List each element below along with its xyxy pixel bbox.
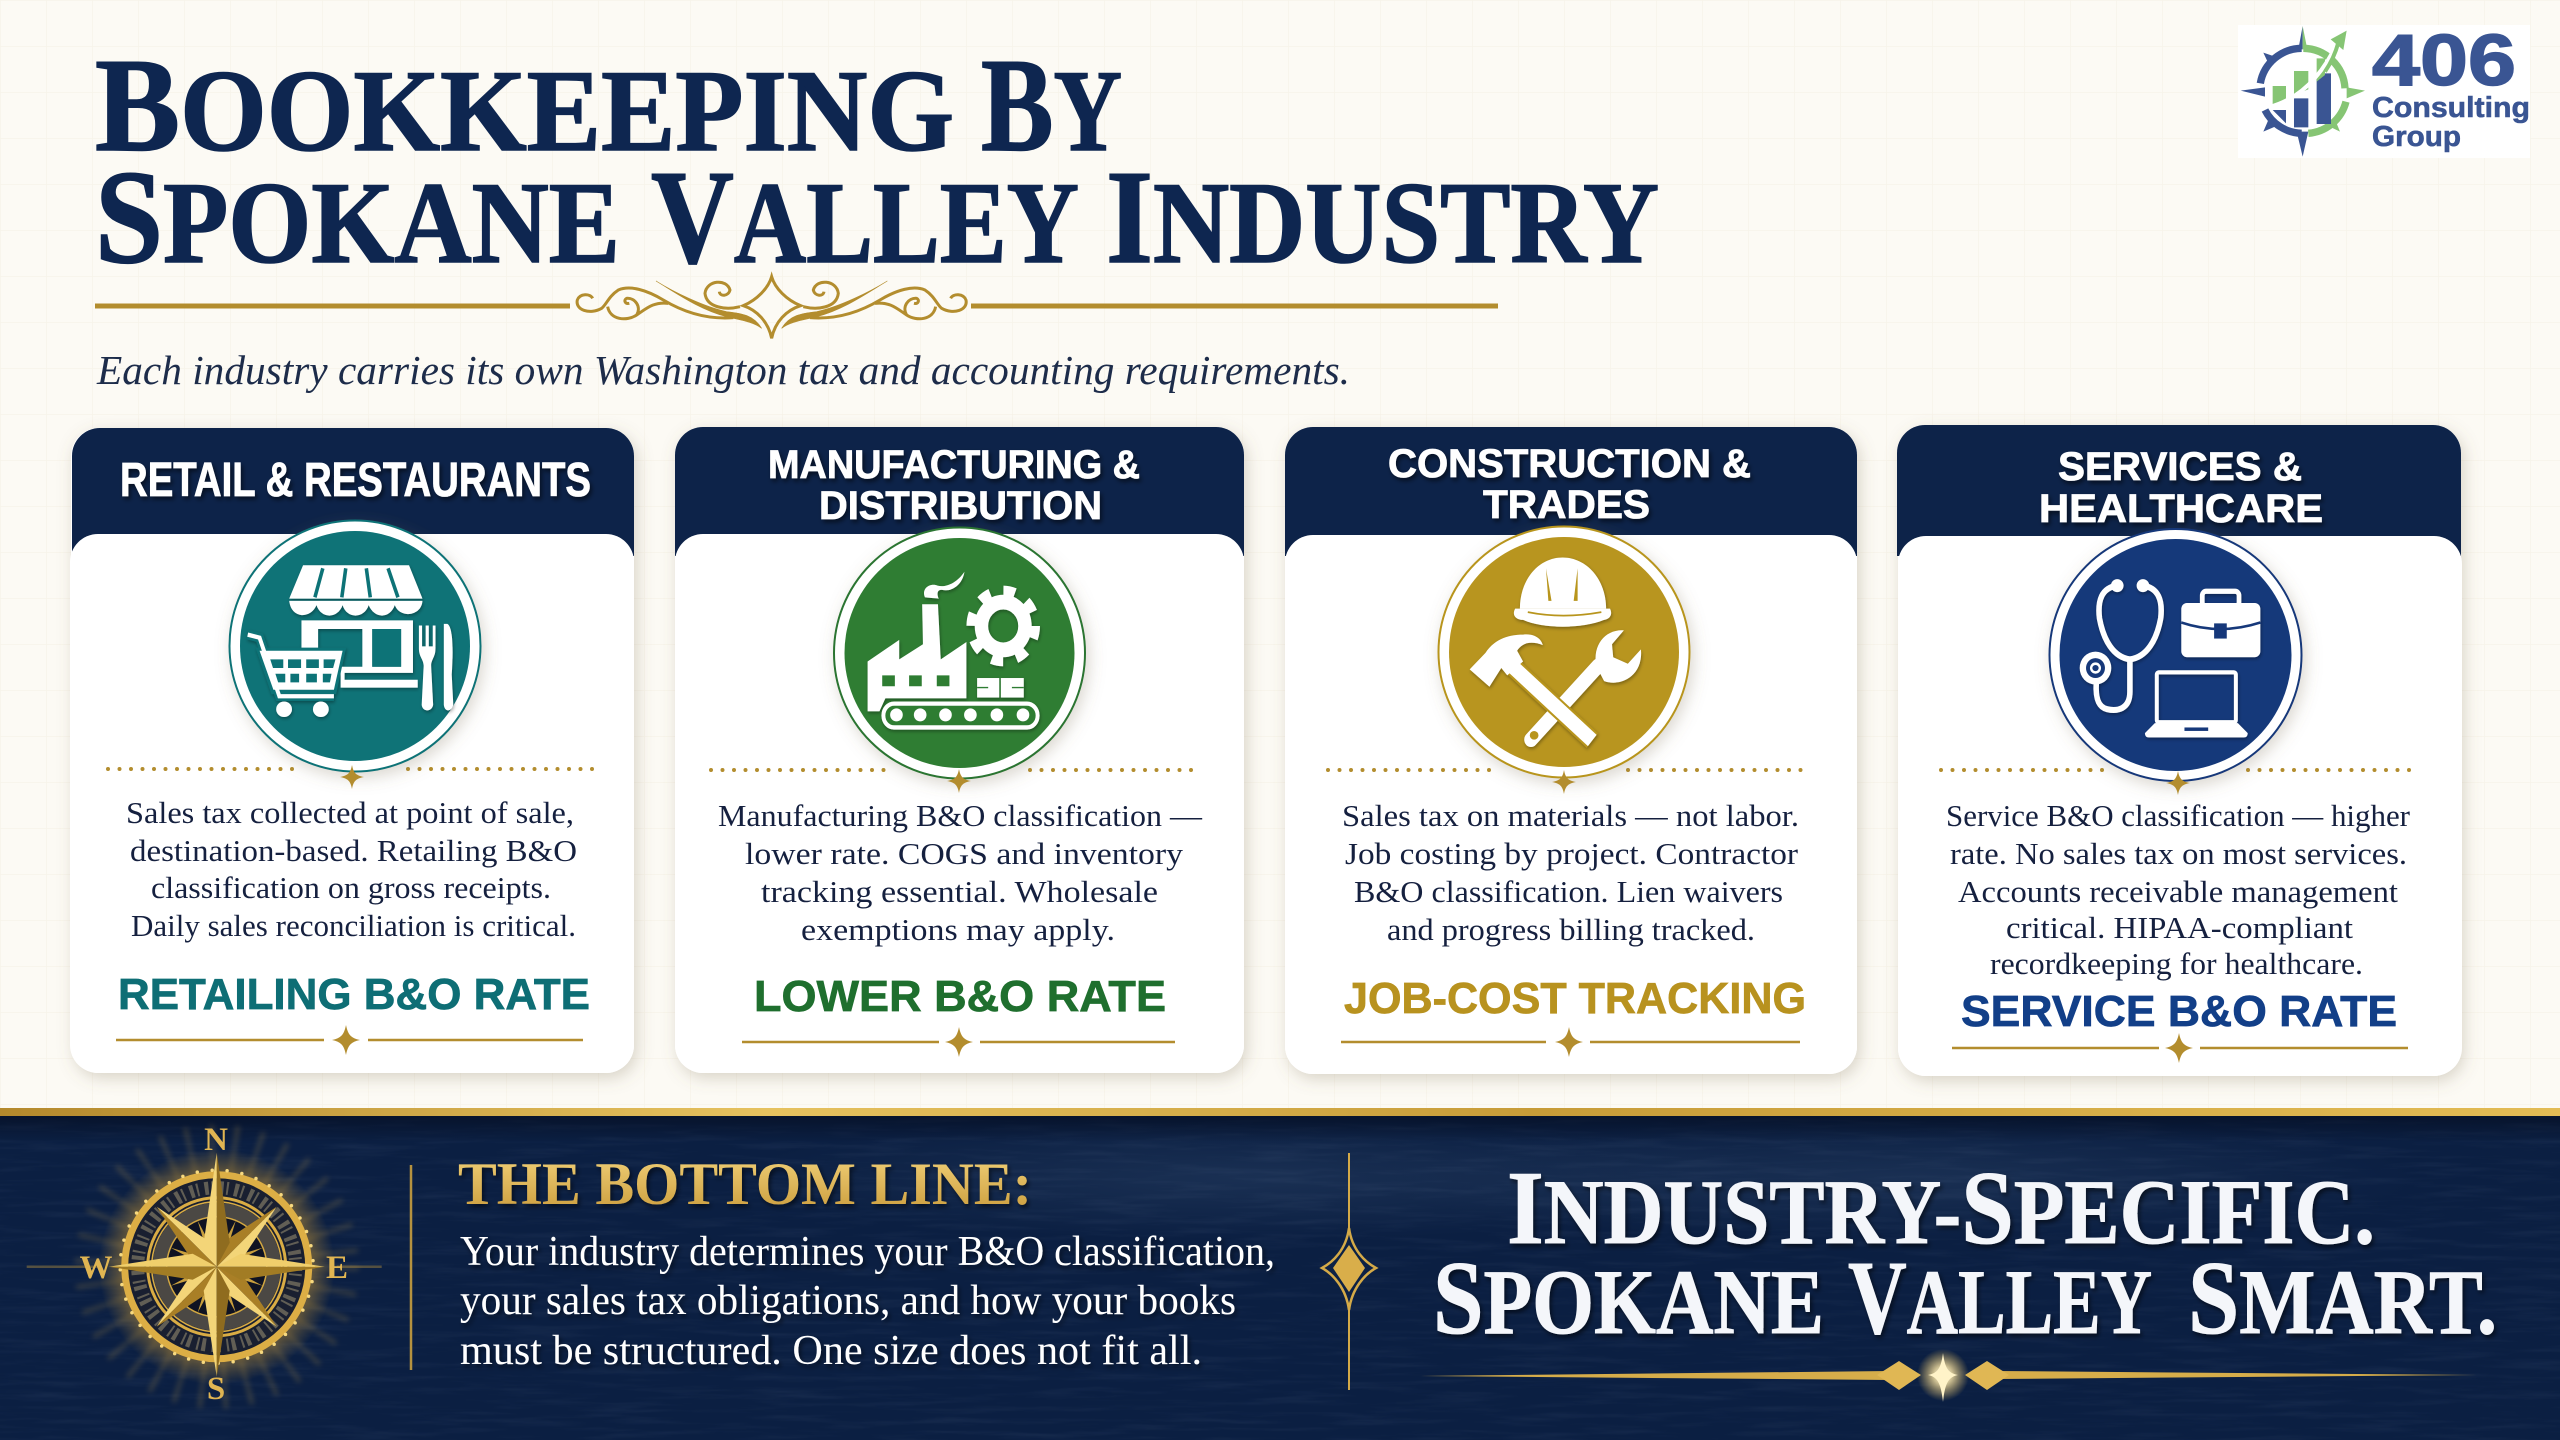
body text: exemptions may apply. [801, 912, 1115, 947]
body text [718, 798, 1203, 947]
rate divider [116, 1025, 583, 1055]
icon: gold compass rose: E [326, 1250, 348, 1286]
body text: destination-based. Retailing B&O [130, 833, 577, 868]
logo: 406 Consulting Group: 406 [2372, 21, 2516, 101]
heading: TRADES [1483, 483, 1650, 527]
closing headline: INDUSTRY-SPECIFIC. [1507, 1149, 2375, 1266]
closing headline: SPOKANE [1433, 1239, 1824, 1356]
rate divider [742, 1027, 1175, 1057]
title: SPOKANE [95, 143, 620, 291]
body text: recordkeeping for healthcare. [1990, 946, 2363, 981]
heading: HEALTHCARE [2039, 487, 2323, 531]
body text: Accounts receivable management [1958, 874, 2398, 909]
body text: critical. HIPAA-compliant [2006, 910, 2353, 945]
title: VALLEY [651, 143, 1079, 291]
title: INDUSTRY [1106, 143, 1659, 291]
icon: gold compass rose: N [204, 1122, 228, 1158]
body text: Service B&O classification — higher [1946, 798, 2411, 833]
panel: retail & restaurants [70, 428, 634, 1073]
rate label: SERVICE B&O RATE [1961, 987, 2397, 1036]
heading: MANUFACTURING & [768, 443, 1140, 487]
logo compass mark [2241, 26, 2365, 157]
body text: lower rate. COGS and inventory [745, 836, 1184, 871]
body text [1342, 798, 1799, 947]
body text: classification on gross receipts. [151, 870, 551, 905]
body text: rate. No sales tax on most services. [1950, 836, 2407, 871]
panel: manufacturing & distribution [675, 427, 1244, 1073]
heading [768, 443, 1140, 528]
bottom band [0, 1108, 2560, 1440]
closing headline: VALLEY [1848, 1239, 2152, 1356]
icon: gold star [947, 769, 971, 793]
bottom line heading: THE BOTTOM LINE: [458, 1151, 1032, 1217]
closing flourish [1420, 1349, 2477, 1402]
divider: bottom line [410, 1165, 412, 1370]
title [95, 31, 1659, 291]
body text [1946, 798, 2411, 981]
heading [2039, 445, 2323, 531]
bottom line text: must be structured. One size does not fit all. [460, 1328, 1202, 1374]
body text: B&O classification. Lien waivers [1354, 874, 1783, 909]
rate divider [1952, 1033, 2408, 1063]
heading [1388, 442, 1751, 527]
rate divider [1341, 1027, 1800, 1057]
vertical ornament [1322, 1153, 1376, 1390]
logo: 406 Consulting Group: Consulting [2372, 92, 2530, 124]
subtitle: Each industry carries its own Washington tax and accounting requirements. [96, 347, 1350, 393]
icon: gold compass rose: W [80, 1250, 112, 1286]
closing headline [1433, 1149, 2497, 1356]
rate label: LOWER B&O RATE [754, 972, 1166, 1021]
body text: Manufacturing B&O classification — [718, 798, 1203, 833]
bottom line text: your sales tax obligations, and how your books [460, 1278, 1236, 1324]
panel: services & healthcare [1897, 425, 2462, 1076]
icon: gold compass rose [27, 1122, 382, 1407]
body text: tracking essential. Wholesale [761, 874, 1158, 909]
rate label: JOB-COST TRACKING [1344, 974, 1806, 1023]
card base [1285, 427, 1857, 1074]
body text: Sales tax on materials — not labor. [1342, 798, 1799, 833]
title: BOOKKEEPING [95, 31, 954, 179]
icon: stethoscope, briefcase and laptop [2050, 529, 2302, 781]
heading: DISTRIBUTION [819, 484, 1102, 528]
icon: gold star [340, 765, 364, 789]
card base [1897, 425, 2462, 1076]
body text: Daily sales reconciliation is critical. [131, 908, 576, 943]
body text: and progress billing tracked. [1387, 912, 1755, 947]
body text [126, 795, 577, 943]
logo: 406 Consulting Group: Group [2372, 121, 2461, 153]
card base [675, 427, 1244, 1073]
title: BY [981, 31, 1122, 179]
panel: construction & trades [1285, 427, 1857, 1074]
card base [70, 428, 634, 1073]
rate label: RETAILING B&O RATE [118, 970, 590, 1019]
icon: gold star [1552, 770, 1576, 794]
bottom line text [460, 1229, 1275, 1374]
icon: hard hat, hammer and wrench [1438, 526, 1690, 778]
icon: gold compass rose: S [207, 1371, 225, 1407]
logo: 406 Consulting Group [2238, 21, 2530, 158]
heading: CONSTRUCTION & [1388, 442, 1751, 486]
heading: RETAIL & RESTAURANTS [120, 454, 591, 507]
icon: gold star [2166, 771, 2190, 795]
body text: Job costing by project. Contractor [1345, 836, 1799, 871]
icon: factory, gear and conveyor [834, 528, 1085, 778]
closing headline: SMART. [2188, 1239, 2497, 1356]
icon: storefront, cart and cutlery [230, 520, 480, 772]
title ornament divider [95, 277, 1498, 338]
heading: SERVICES & [2058, 445, 2302, 489]
body text: Sales tax collected at point of sale, [126, 795, 574, 830]
bottom line text: Your industry determines your B&O classification, [460, 1229, 1275, 1275]
